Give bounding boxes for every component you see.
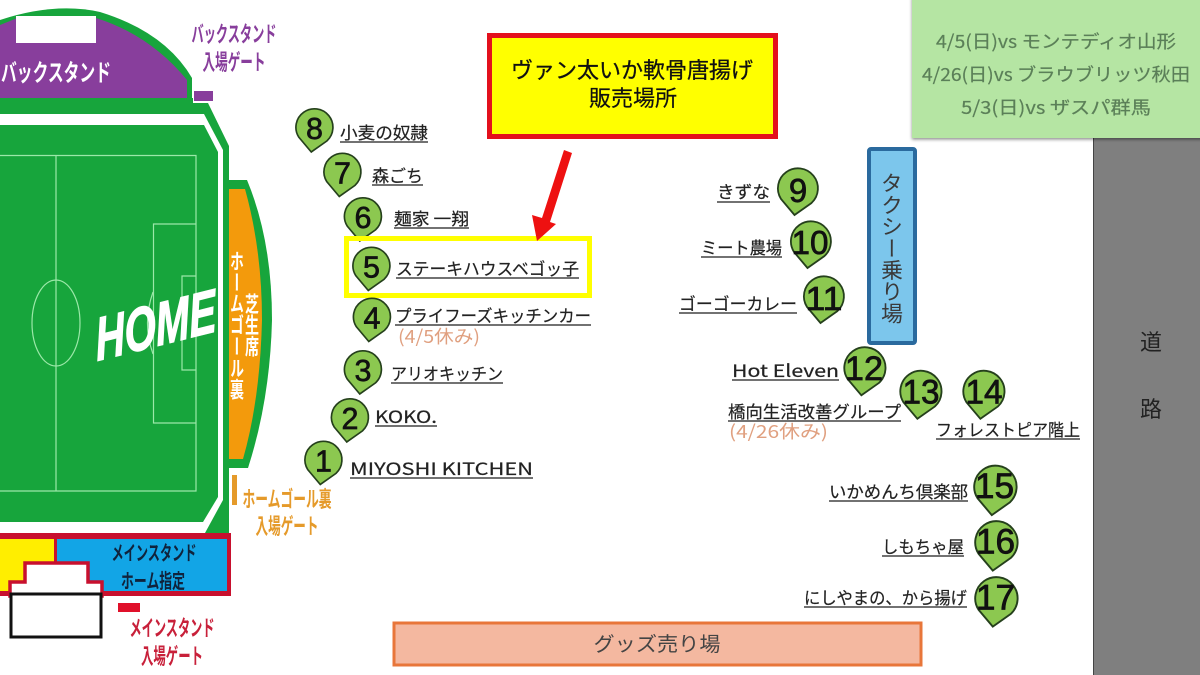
stall 5 — [353, 247, 579, 290]
stall 12: Hot Eleven — [732, 357, 839, 382]
pitch surround — [0, 98, 229, 533]
main stand: ホーム指定 — [121, 565, 185, 594]
stall 8: 小麦の奴隷 — [340, 119, 428, 144]
taxi stand: タクシー乗り場 — [876, 172, 908, 324]
stall 14 — [936, 371, 1080, 441]
stall 4: 4 — [364, 302, 381, 336]
stall 11: ゴーゴーカレー — [679, 290, 797, 315]
taxi stand — [869, 149, 915, 343]
callout: sales location: 販売場所 — [589, 81, 677, 113]
stall 14: 14 — [965, 373, 1003, 411]
gate: main stand — [118, 603, 214, 671]
stall 2: 2 — [342, 402, 358, 436]
road: 道 — [1140, 325, 1162, 357]
HOME logo: HOME — [93, 275, 219, 374]
stall 7: 7 — [334, 157, 351, 191]
stall 15 — [829, 466, 1017, 515]
stall 13 — [728, 371, 942, 444]
stall 13: 13 — [902, 373, 940, 411]
stall 14: フォレストピア階上 — [936, 416, 1080, 441]
stall 3 — [344, 351, 503, 394]
goods sales area — [394, 623, 921, 665]
match dates box: 5/3(日)vs ザスパ群馬 — [961, 94, 1151, 120]
stall 11: 11 — [806, 280, 842, 317]
stall 15: 15 — [975, 467, 1014, 506]
stall 4 — [353, 298, 591, 349]
stall 6: 麺家 一翔 — [394, 205, 469, 230]
stall 11 — [679, 276, 844, 323]
road — [1093, 0, 1200, 675]
goods sales area: グッズ売り場 — [594, 628, 720, 657]
stall 2 — [331, 399, 437, 442]
stall 13: (4/26休み) — [729, 418, 828, 444]
gate: back stand — [192, 17, 276, 101]
stall 5: ステーキハウスベゴッ子 — [396, 255, 579, 280]
stall 16: しもちゃ屋 — [882, 533, 964, 558]
match dates box: 4/5(日)vs モンテディオ山形 — [936, 28, 1176, 54]
stall 9: 9 — [789, 172, 807, 209]
stall 4: プライフーズキッチンカー — [395, 302, 591, 327]
home goal stand: ホームゴール裏 — [227, 250, 247, 402]
stall 10: 10 — [792, 224, 828, 261]
stall 8: 8 — [306, 112, 323, 146]
stall 17: にしやまの、から揚げ — [804, 584, 967, 609]
stall 9: きずな — [717, 178, 770, 203]
home goal stand: 芝生席 — [242, 292, 262, 357]
stall 16: 16 — [976, 523, 1015, 562]
stall 1 — [305, 441, 533, 484]
match dates box — [912, 0, 1200, 138]
stall 13: 橋向生活改善グループ — [728, 398, 901, 423]
main stand — [0, 533, 231, 637]
gate: main stand: メインスタンド — [130, 611, 214, 643]
stall 6 — [344, 198, 469, 241]
gate: home goal: 入場ゲート — [256, 509, 318, 541]
stall 17 — [804, 577, 1018, 627]
stall 17: 17 — [976, 579, 1015, 618]
arrow — [532, 150, 572, 241]
pitch — [0, 125, 219, 522]
stall 1: 1 — [315, 445, 332, 479]
stall 15: いかめんち倶楽部 — [829, 478, 968, 503]
stall 5: 5 — [363, 251, 380, 285]
home goal stand — [227, 180, 272, 468]
stall 12: 12 — [845, 350, 883, 388]
back stand — [0, 8, 192, 103]
gate: main stand: 入場ゲート — [141, 639, 203, 671]
road: 路 — [1140, 392, 1162, 424]
stall 7 — [324, 153, 423, 196]
stall 7: 森ごち — [372, 162, 423, 187]
callout: sales location — [490, 36, 776, 136]
highlight box: stall 5 — [346, 238, 590, 296]
gate: back stand: バックスタンド — [192, 17, 276, 49]
stall 8 — [296, 109, 428, 152]
callout: sales location: ヴァン太いか軟骨唐揚げ — [511, 53, 753, 85]
stall 16 — [882, 521, 1018, 571]
stall 9 — [717, 168, 818, 215]
gate: home goal — [232, 475, 332, 541]
main stand: メインスタンド — [112, 537, 196, 566]
stall 2: KOKO. — [375, 403, 437, 428]
gate: back stand: 入場ゲート — [202, 45, 266, 77]
stall 1: MIYOSHI KITCHEN — [350, 455, 533, 480]
stall 6: 6 — [355, 201, 371, 235]
stall 3: 3 — [355, 354, 371, 388]
stall 12 — [732, 347, 886, 395]
stall 4: (4/5休み) — [398, 323, 480, 349]
stall 10: ミート農場 — [701, 234, 782, 259]
back stand: バックスタンド — [1, 53, 111, 88]
gate: home goal: ホームゴール裏 — [242, 482, 332, 514]
stadium map — [0, 8, 272, 637]
match dates box: 4/26(日)vs ブラウブリッツ秋田 — [922, 61, 1190, 87]
stall 10 — [701, 221, 831, 268]
stall 3: アリオキッチン — [391, 360, 503, 385]
